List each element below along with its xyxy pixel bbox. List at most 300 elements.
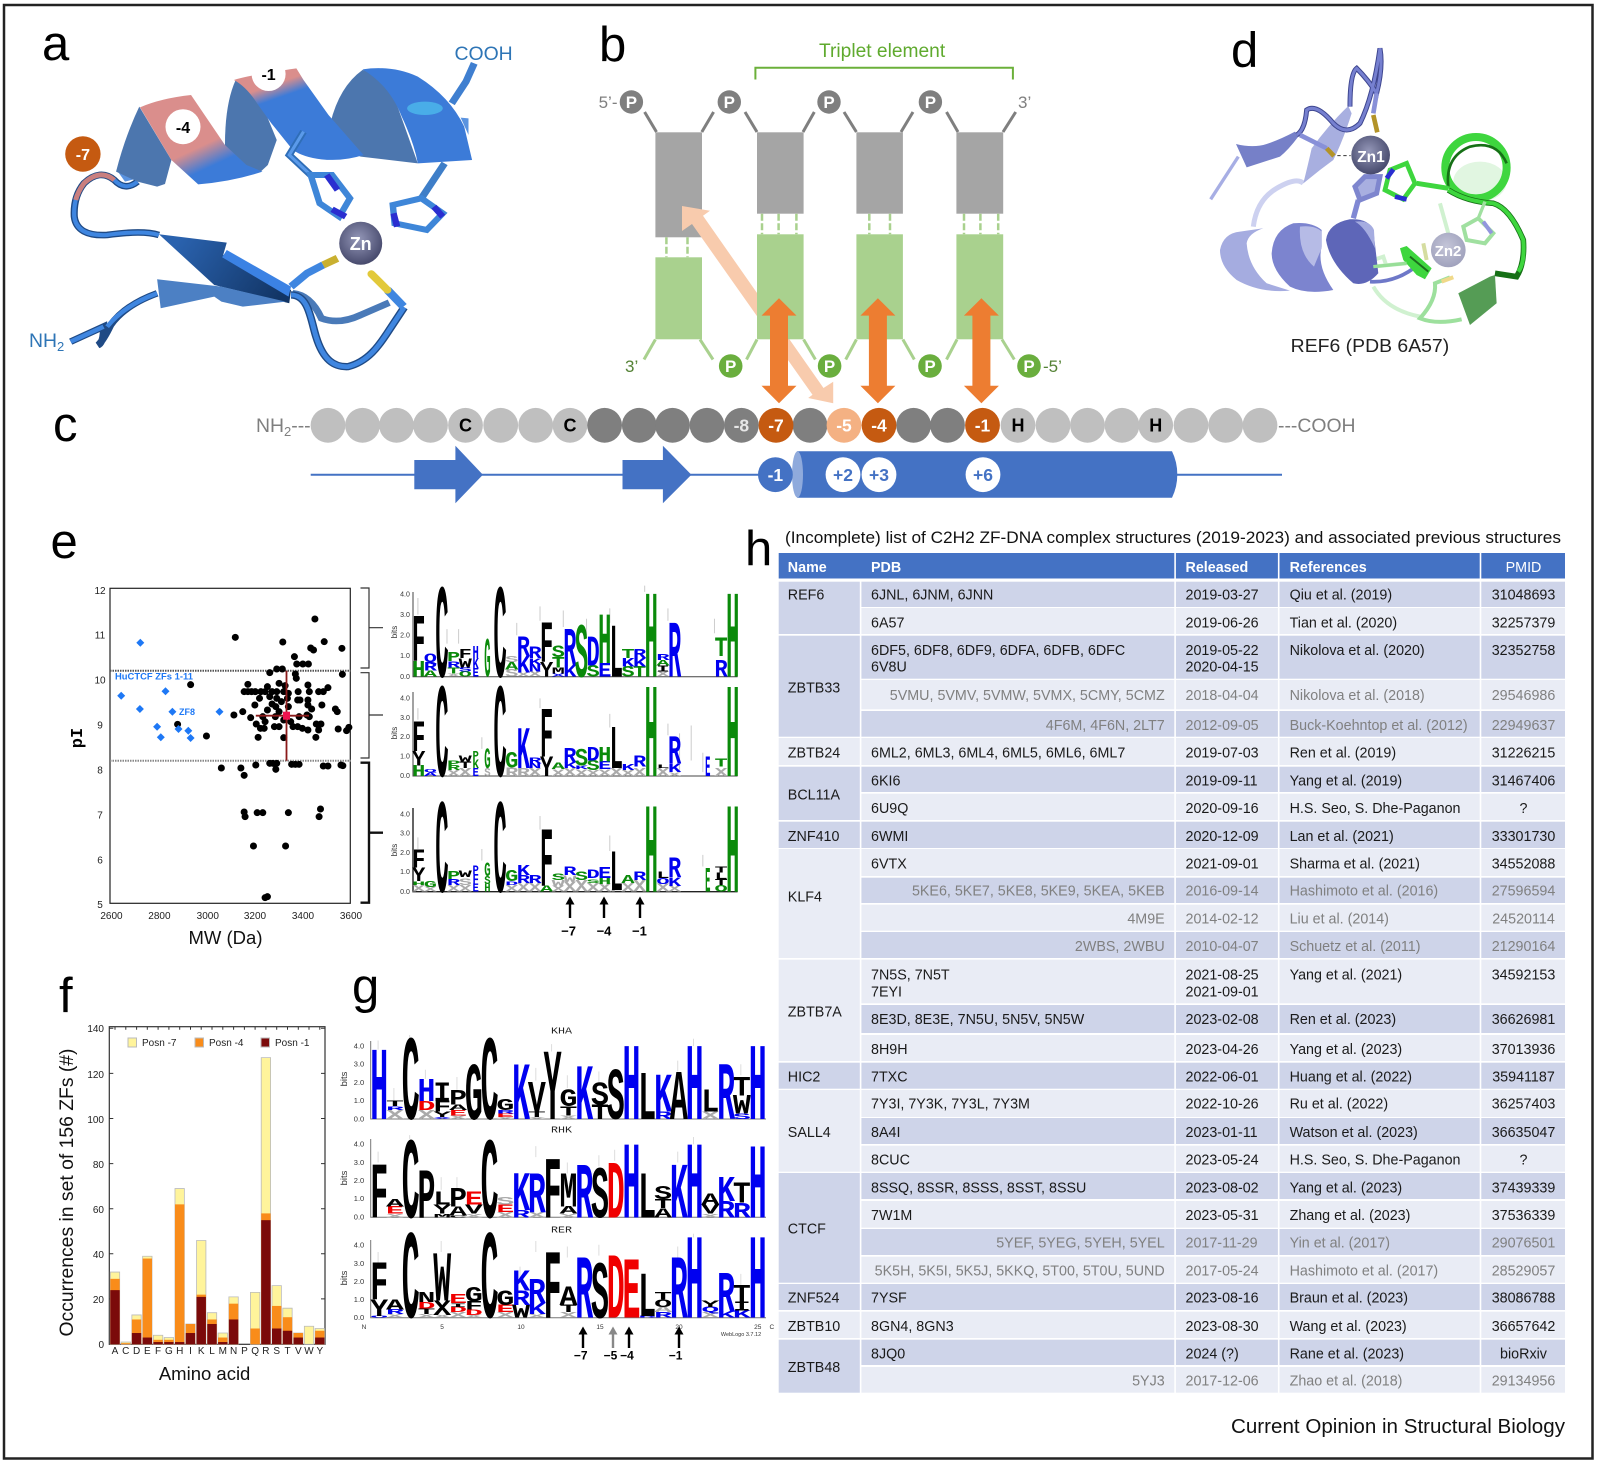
logo RER: H (749, 1216, 767, 1355)
table title: (Incomplete) list of C2H2 ZF-DNA complex structures (2019-2023) and associated previous structures (785, 529, 1561, 547)
panel a: zinc finger ribbon structure (29, 17, 513, 367)
logo RHK: K (717, 1170, 735, 1212)
logo KHA: L (638, 1062, 656, 1140)
scatter plot: ZF8 (179, 707, 195, 717)
logo RER: X (386, 1313, 404, 1320)
logo mid pI: R (668, 730, 681, 776)
logo low pI: X (552, 885, 566, 895)
row group ZBTB33: 4F6M, 4F6N, 2LT7 (1046, 718, 1165, 734)
row group ZBTB7A: Yang et al. (2021) (1290, 967, 1402, 983)
logo low pI: X (621, 882, 635, 896)
row group KLF4: 24520114 (1492, 912, 1555, 928)
x axis letters: Q (251, 1346, 259, 1357)
logo mid pI: X (714, 767, 728, 780)
panel g: WebLogo sequence logos by triplet class (339, 960, 774, 1362)
logo RER: E (623, 1244, 640, 1344)
logo RER: X (465, 1314, 483, 1319)
logo high pI: K (528, 657, 543, 668)
scatter plot (69, 586, 363, 948)
logo KHA: X (386, 1108, 404, 1123)
scatter plot: pI (69, 728, 88, 748)
row group CTCF: 5K5H, 5K5I, 5K5J, 5KKQ, 5T00, 5T0U, 5UND (875, 1263, 1165, 1279)
x axis title: Amino acid (159, 1363, 250, 1384)
logo RHK: bits (339, 1170, 350, 1185)
logo mid pI: X (656, 767, 670, 780)
logo mid pI: Y (540, 751, 554, 785)
logo high pI: S (459, 666, 472, 673)
row group ZBTB7A: 7N5S, 7N5T (871, 967, 950, 983)
arrow: -4 contact (860, 298, 895, 403)
row group ZBTB33: 22949637 (1492, 718, 1555, 734)
logo RER (339, 1212, 767, 1356)
logo low pI: R (668, 852, 682, 886)
NH2 end label: 2 (284, 424, 291, 439)
logo high pI: S (552, 643, 565, 662)
logo high pI: F (459, 647, 472, 663)
logo RHK: E (386, 1204, 404, 1217)
row group ZBTB7A: 8E3D, 8E3E, 7N5U, 5N5V, 5N5W (871, 1012, 1085, 1028)
panel f: amino acid occurrence bar chart (56, 969, 325, 1384)
logo RHK: A (654, 1206, 672, 1221)
logo mid pI: R (528, 757, 543, 767)
row group KLF4: 5KE6, 5KE7, 5KE8, 5KE9, 5KEA, 5KEB (912, 884, 1165, 900)
logo low pI: R (447, 878, 461, 888)
x axis letters: V (295, 1346, 302, 1357)
bottom strand bases and phosphates: P (924, 357, 936, 376)
logo low pI: X (412, 884, 426, 895)
logo RHK: M (559, 1166, 577, 1222)
logo mid pI: T (714, 757, 728, 770)
logo mid pI: L (656, 763, 670, 770)
logo KHA: V (528, 1077, 546, 1126)
logo RER: N (418, 1290, 435, 1307)
plot frame and axes: 40 (93, 1250, 104, 1261)
row group CTCF: 2017-05-24 (1186, 1263, 1259, 1279)
row group ZBTB48: 29134956 (1492, 1374, 1555, 1390)
position -1 marker (252, 57, 286, 91)
row group ZNF410: Lan et al. (2021) (1290, 829, 1394, 845)
x axis letters: C (122, 1346, 129, 1357)
logo mid pI: G (484, 744, 491, 778)
logo low pI: R (633, 870, 646, 884)
logo RER: Y (701, 1299, 720, 1310)
ribbon model (71, 63, 474, 367)
row group ZNF410: 33301730 (1492, 829, 1555, 845)
position -4 marker (166, 109, 200, 144)
logo KHA: Y (433, 1110, 452, 1120)
logo KHA: 3.0 (354, 1060, 364, 1068)
row group CTCF: 8SSQ, 8SSR, 8SSS, 8SST, 8SSU (871, 1181, 1086, 1197)
table (779, 553, 1565, 1393)
row group REF6: 31048693 (1492, 588, 1555, 604)
row group KLF4: 6VTX (871, 856, 907, 872)
logo low pI: G (505, 868, 518, 886)
logo low pI: F (610, 889, 623, 893)
row group ZBTB10: 8GN4, 8GN3 (871, 1319, 954, 1335)
logo low pI: A (540, 885, 554, 895)
logo RER: O (654, 1297, 672, 1310)
logo low pI: H (726, 784, 739, 931)
logo low pI: X (633, 877, 646, 897)
logo low pI: 4.0 (400, 812, 410, 818)
row group CTCF: CTCF (788, 1221, 826, 1237)
x axis letters: R (262, 1346, 270, 1357)
heading e: e (50, 515, 78, 569)
row group CTCF (779, 1173, 1565, 1283)
plot frame and axes: 100 (87, 1115, 104, 1126)
row group ZBTB7A: 34592153 (1492, 967, 1555, 983)
logo KHA: P (449, 1086, 467, 1111)
logo RER: R (654, 1311, 673, 1320)
logo high pI: K (633, 657, 647, 671)
logo KHA: X (496, 1117, 515, 1120)
logo mid pI: X (610, 767, 624, 780)
logo mid pI: P (447, 759, 460, 768)
logo mid pI: 2.0 (400, 734, 410, 741)
residue chain: -7 (768, 416, 784, 436)
logo RHK: K (512, 1165, 530, 1227)
x axis letters: W (304, 1346, 314, 1357)
logo RHK: 2.0 (354, 1176, 364, 1185)
row group KLF4: 2016-09-14 (1186, 884, 1259, 900)
logo high pI: 4.0 (400, 592, 410, 598)
scatter plot: 10 (94, 676, 106, 686)
row group SALL4: 8CUC (871, 1152, 910, 1168)
row group ZBTB48: 2024 (?) (1186, 1346, 1239, 1362)
logo low pI: W (552, 879, 566, 889)
logo RER: X (433, 1314, 452, 1319)
hydrogen bonds (666, 214, 998, 257)
top strand bases and phosphates: P (823, 93, 835, 112)
row group CTCF: Yin et al. (2017) (1290, 1235, 1390, 1251)
row group KLF4: Sharma et al. (2021) (1290, 856, 1420, 872)
top strand bases and phosphates: 5’- (599, 93, 618, 112)
logo high pI: S (505, 655, 518, 666)
logo KHA: I (433, 1078, 451, 1109)
row group CTCF: Hashimoto et al. (2017) (1290, 1263, 1438, 1279)
row group SALL4: 8A4I (871, 1125, 900, 1141)
logo high pI: K (473, 657, 480, 674)
logo RER: L (638, 1263, 656, 1335)
logo low pI: X (575, 877, 588, 897)
row group REF6: 32257379 (1492, 616, 1555, 632)
logo RER: T (654, 1290, 672, 1303)
logo position axis: C (769, 1324, 774, 1331)
arrows marking positions -7 -5 -4 -1: −7 (574, 1348, 588, 1362)
logo RER: K (733, 1308, 751, 1321)
table header: References (1290, 560, 1367, 576)
logo high pI: R (528, 644, 542, 663)
logo RER: 4.0 (354, 1240, 364, 1250)
row group ZBTB48: bioRxiv (1500, 1346, 1548, 1362)
logo KHA: T (559, 1104, 577, 1120)
logo mid pI: X (598, 768, 612, 780)
arrow: -7 contact (762, 298, 796, 403)
logo mid pI: H (645, 664, 658, 818)
logo KHA: D (418, 1099, 435, 1114)
logo low pI: G (484, 859, 491, 882)
logo KHA: S (733, 1112, 751, 1122)
arrows marking positions -7 -5 -4 -1: −4 (620, 1348, 634, 1362)
logo KHA: X (418, 1108, 435, 1123)
logo mid pI: P (473, 748, 479, 764)
logo high pI: H (645, 574, 658, 716)
logo mid pI: A (552, 761, 566, 773)
logo low pI: W (459, 869, 473, 881)
bottom strand bases and phosphates: P (725, 357, 736, 376)
logo mid pI: F (412, 715, 425, 765)
logo RHK: A (559, 1204, 578, 1217)
logo RER: bits (339, 1270, 350, 1285)
row group CTCF: 2023-08-02 (1186, 1181, 1259, 1197)
row group CTCF: Yang et al. (2023) (1290, 1181, 1402, 1197)
logo RHK: 3.0 (354, 1158, 364, 1167)
row group ZNF524: 7YSF (871, 1291, 907, 1307)
logo RHK: A (386, 1197, 405, 1210)
logo mid pI: X (552, 768, 566, 780)
logo low pI: X (656, 882, 670, 896)
logo mid pI: N (528, 762, 542, 770)
scatter plot: 3000 (197, 911, 219, 922)
scatter plot: 2800 (148, 911, 171, 922)
logo low pI: O (714, 884, 728, 895)
logo RHK: T (654, 1197, 672, 1212)
logo RHK: E (465, 1188, 483, 1211)
row group ZNF524: Braun et al. (2023) (1290, 1291, 1408, 1307)
logo KHA: F (433, 1099, 451, 1117)
logo high pI: M (552, 666, 565, 677)
logo RER: S (591, 1249, 609, 1343)
journal credit: Current Opinion in Structural Biology (1231, 1416, 1565, 1438)
logo KHA: R (386, 1105, 404, 1112)
scatter plot: 12 (94, 586, 106, 597)
logo RHK (339, 1121, 767, 1253)
logo RHK: H (749, 1127, 767, 1250)
logo low pI: L (610, 842, 623, 908)
logo high pI: K (517, 652, 531, 681)
row group ZNF524 (779, 1284, 1565, 1310)
row group KLF4: 21290164 (1492, 939, 1555, 955)
logo high pI: X (656, 670, 670, 679)
logo KHA: T (733, 1072, 751, 1104)
row group ZBTB33: Nikolova et al. (2020) (1290, 643, 1425, 659)
plot frame and axes: 140 (87, 1024, 104, 1035)
logo low pI: H (645, 784, 658, 931)
row group ZBTB7A: Ren et al. (2023) (1290, 1012, 1396, 1028)
arrows marking positions -7 -4 -1: −1 (632, 924, 647, 938)
row group KLF4: Schuetz et al. (2011) (1290, 939, 1420, 955)
COOH end label: ---COOH (1278, 415, 1356, 437)
logo low pI: S (575, 870, 588, 884)
NH2 end label: --- (291, 415, 311, 437)
table header: PDB (871, 560, 901, 576)
logo KHA: 1.0 (354, 1096, 364, 1105)
logo mid pI: E (473, 768, 479, 780)
x axis letters: Y (316, 1346, 323, 1357)
logo RER: D (418, 1301, 435, 1312)
logo position axis (362, 1324, 774, 1338)
logo RHK: S (654, 1183, 672, 1205)
logo high pI: R (563, 619, 577, 682)
logo low pI: D (505, 880, 519, 887)
row group REF6: 2019-03-27 (1186, 588, 1259, 604)
table header: PMID (1506, 560, 1541, 576)
plot frame and axes: 20 (93, 1295, 104, 1306)
logo position axis: 20 (675, 1324, 683, 1331)
logo KHA: T (528, 1110, 546, 1120)
logo high pI: A (424, 669, 438, 680)
logo high pI: E (598, 660, 611, 683)
row group SALL4: ? (1520, 1152, 1528, 1168)
logo low pI: O (656, 877, 670, 887)
x axis letters: F (155, 1346, 161, 1357)
logo mid pI: F (540, 697, 553, 778)
logo position axis: 10 (517, 1324, 525, 1331)
y axis title: Occurrences in set of 156 ZFs (#) (56, 1048, 78, 1336)
row group SALL4: 36257403 (1492, 1097, 1555, 1113)
logo mid pI: K (621, 763, 636, 773)
row group ZNF524: 38086788 (1492, 1291, 1555, 1307)
logo mid pI: C (435, 664, 449, 818)
logo mid pI: X (528, 767, 542, 780)
logo low pI (390, 780, 739, 934)
logo high pI: R (424, 661, 437, 675)
arrows marking positions -7 -4 -1 (561, 896, 647, 938)
row group ZBTB7A: 2021-09-01 (1186, 985, 1259, 1001)
row group ZBTB33: 2018-04-04 (1186, 688, 1259, 704)
scatter plot: 8 (97, 766, 103, 776)
row group BCL11A: 6U9Q (871, 801, 908, 817)
logo low pI: H (484, 883, 491, 896)
logo RER: R (638, 1315, 657, 1319)
logo low pI: X (459, 884, 473, 895)
logo RER: K (512, 1266, 531, 1300)
logo high pI: D (587, 630, 600, 679)
NH2 label: 2 (57, 339, 64, 354)
logo low pI: S (459, 877, 472, 889)
logo low pI: D (587, 868, 600, 882)
heading g: g (352, 960, 379, 1014)
logo mid pI: X (563, 767, 577, 780)
logo high pI: T (633, 664, 646, 682)
logo high pI: I (656, 664, 670, 675)
secondary structure topology: -1 (768, 465, 783, 485)
logo low pI: bits (390, 844, 399, 856)
row group KLF4: 4M9E (1127, 912, 1165, 928)
logo mid pI: K (473, 757, 480, 773)
row group CTCF: 2017-11-29 (1186, 1235, 1258, 1251)
logo low pI: H (412, 880, 425, 887)
logo KHA: T (591, 1100, 609, 1126)
logo KHA (339, 1017, 767, 1156)
logo low pI: E (705, 863, 710, 903)
logo low pI: 1.0 (400, 869, 410, 876)
row group SALL4: 2022-10-26 (1186, 1097, 1259, 1113)
logo mid pI: K (563, 761, 578, 771)
logo low pI: T (714, 865, 728, 875)
panel h: table of C2H2 ZF-DNA complex structures (745, 522, 1565, 1393)
bottom strand bases and phosphates (625, 234, 1062, 378)
logo low pI: X (447, 884, 461, 895)
row group KLF4: 34552088 (1492, 856, 1555, 872)
logo KHA: R (496, 1109, 514, 1115)
row group ZBTB33: 29546986 (1492, 688, 1555, 704)
heading d: d (1231, 24, 1258, 78)
row group ZBTB48: Rane et al. (2023) (1290, 1346, 1404, 1362)
logo RHK: C (481, 1121, 499, 1253)
panel d: REF6 tandem zinc finger structure (1211, 24, 1524, 356)
logo RER: 3.0 (354, 1259, 364, 1268)
row group SALL4 (779, 1090, 1565, 1172)
logo KHA: A (670, 1059, 688, 1141)
logo position axis: WebLogo 3.7.12 (721, 1332, 761, 1338)
logo mid pI: A (424, 771, 437, 778)
logo RHK: C (402, 1121, 420, 1253)
plot frame and axes (87, 1024, 325, 1351)
residue chain: C (564, 416, 576, 436)
logo low pI: C (493, 780, 507, 934)
row group ZBTB10: 2023-08-30 (1186, 1319, 1259, 1335)
logo mid pI: G (505, 748, 518, 774)
scatter plot: 3400 (292, 911, 315, 922)
ribbon model REF6 (1211, 48, 1524, 325)
logo RHK: L (433, 1188, 451, 1211)
row group ZBTB7A: 7EYI (871, 985, 902, 1001)
logo mid pI: R (563, 744, 577, 769)
row group ZBTB48: ZBTB48 (788, 1360, 840, 1376)
row group ZBTB7A: Yang et al. (2023) (1290, 1042, 1402, 1058)
residue chain: C (459, 416, 472, 436)
row group BCL11A: 6KI6 (871, 774, 900, 790)
logo high pI: 0.0 (400, 674, 410, 681)
top strand bases and phosphates (599, 90, 1031, 237)
logo mid pI: H (412, 763, 425, 781)
logo RER: F (544, 1236, 562, 1349)
logo low pI: F (473, 871, 479, 889)
logo RHK: C (449, 1215, 467, 1218)
logo low pI: K (668, 876, 681, 890)
logo low pI: S (484, 876, 491, 888)
logo RHK: 4.0 (354, 1140, 364, 1148)
logo mid pI: K (575, 764, 589, 771)
logo RHK: K (670, 1152, 688, 1242)
logo high pI: R (656, 653, 671, 663)
logo high pI: Q (424, 652, 437, 666)
logo high pI: E (473, 667, 479, 681)
logo mid pI: X (459, 767, 472, 780)
logo KHA: H (623, 1029, 640, 1153)
row group ZBTB48: 5YJ3 (1132, 1374, 1165, 1390)
logo mid pI: X (633, 767, 647, 780)
row group KLF4: Hashimoto et al. (2016) (1290, 884, 1438, 900)
row group ZBTB33: 32352758 (1492, 643, 1555, 659)
row group ZBTB7A: 2023-04-26 (1186, 1042, 1259, 1058)
heading a: a (42, 17, 70, 71)
row group BCL11A: BCL11A (788, 787, 840, 803)
row group ZNF410 (779, 822, 1565, 848)
logo KHA: C (481, 1017, 499, 1156)
logo RHK: V (465, 1202, 483, 1218)
scatter plot: 9 (97, 720, 103, 732)
logo KHA: H (370, 1033, 388, 1152)
logo RER: T (418, 1307, 435, 1317)
row group HIC2 (779, 1063, 1565, 1089)
logo RER: X (528, 1313, 546, 1320)
logo KHA: X (433, 1117, 452, 1120)
logo mid pI (390, 664, 739, 818)
logo RHK: X (465, 1213, 483, 1219)
logo high pI: T (552, 654, 565, 672)
